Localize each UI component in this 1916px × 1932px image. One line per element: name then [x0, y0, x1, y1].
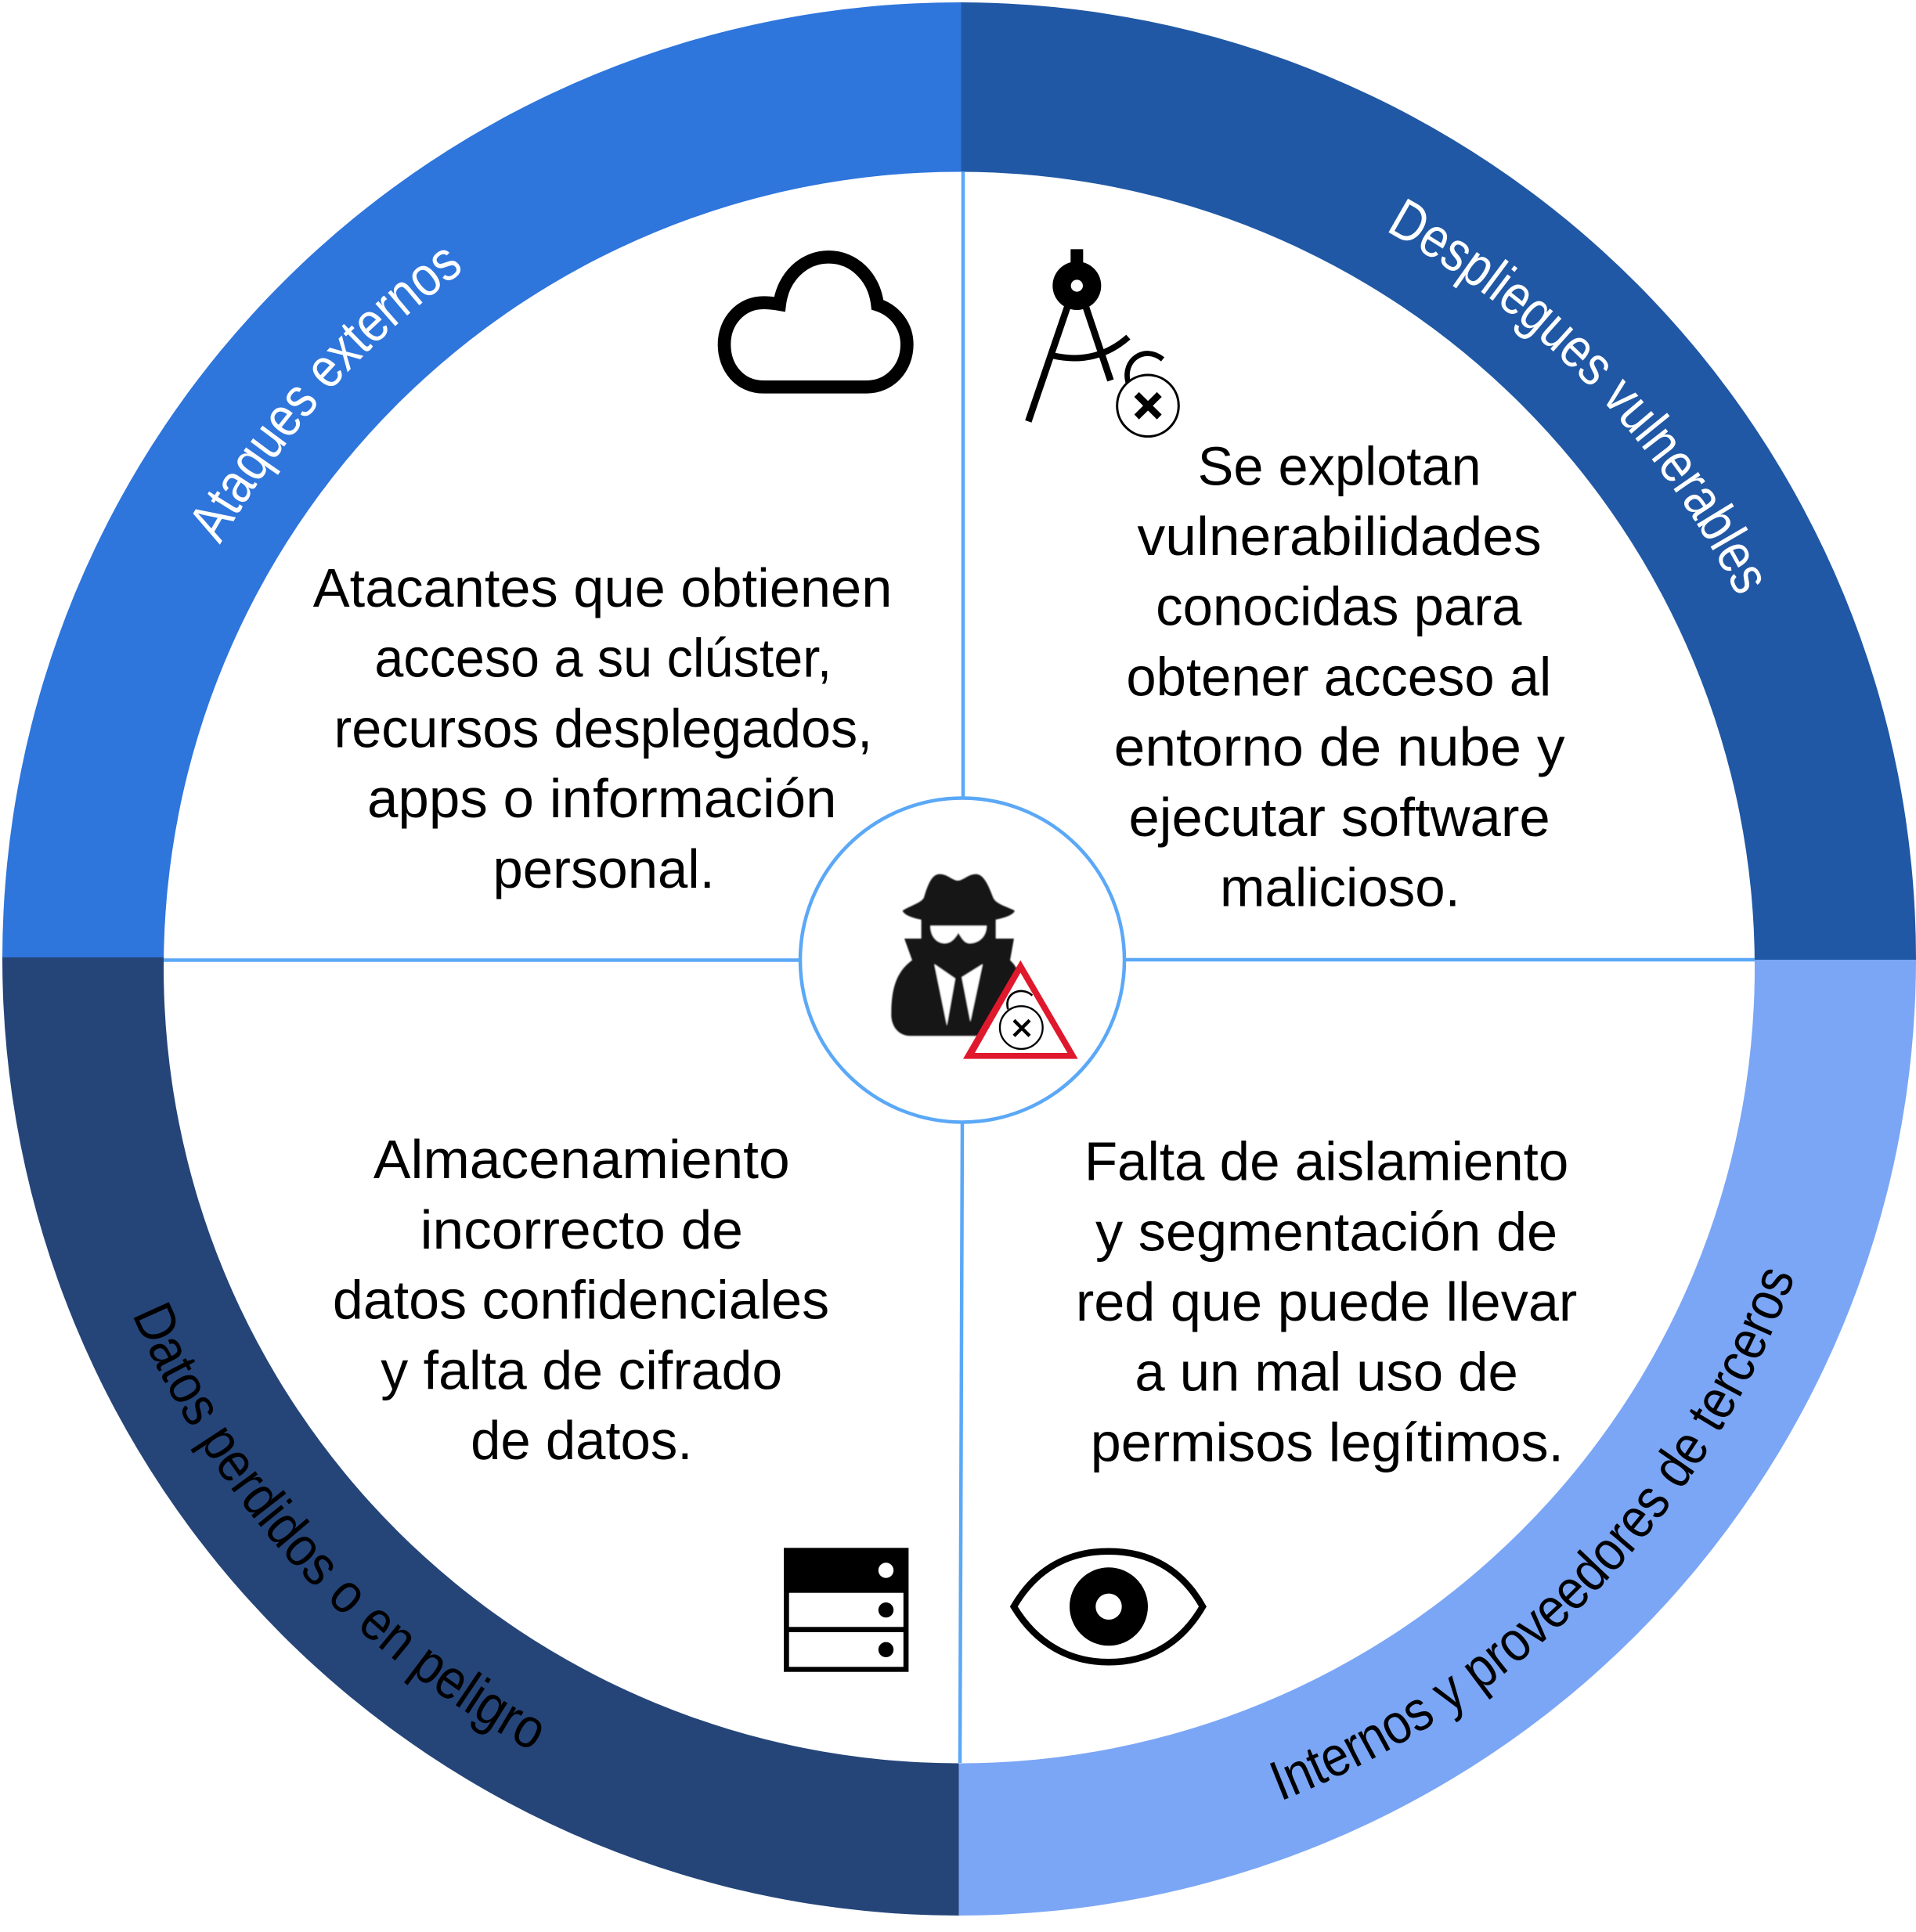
text block: vulnerable deployments: malicioso. — [1220, 856, 1460, 917]
icon: compass with open lock — [1028, 249, 1178, 437]
ring label: Ataques externos: Ataques externos — [193, 251, 460, 545]
text block: insiders and third parties: a un mal uso de — [1135, 1342, 1518, 1403]
icon: eye — [1014, 1552, 1203, 1662]
text block: lost data: y falta de cifrado — [381, 1339, 782, 1400]
icon: cloud — [724, 257, 907, 387]
text block: external attacks: recursos desplegados, — [334, 697, 872, 759]
text block: vulnerable deployments: ejecutar software — [1129, 787, 1550, 848]
text block: insiders and third parties — [1076, 1131, 1577, 1472]
text block: insiders and third parties: red que puede llevar — [1076, 1271, 1577, 1332]
text block: external attacks: apps o información — [367, 768, 837, 829]
text block: external attacks — [313, 557, 892, 899]
icon: spy with warning triangle — [891, 874, 1078, 1059]
text block: external attacks: acceso a su clúster, — [374, 628, 832, 689]
text block: external attacks: personal. — [493, 838, 715, 899]
ring label: Internos y proveedores de terceros: Internos y proveedores de terceros — [1270, 1270, 1793, 1800]
text block: lost data — [333, 1129, 829, 1471]
ring label: Datos perdidos o en peligro: Datos perdidos o en peligro — [133, 1302, 542, 1747]
text block: vulnerable deployments: vulnerabilidades — [1138, 506, 1542, 567]
text block: insiders and third parties: y segmentación de — [1095, 1201, 1557, 1262]
text block: lost data: datos confidenciales — [333, 1270, 829, 1331]
text block: vulnerable deployments: entorno de nube y — [1114, 716, 1565, 777]
text block: vulnerable deployments: conocidas para — [1156, 576, 1522, 637]
text block: lost data: de datos. — [471, 1410, 692, 1471]
text block: insiders and third parties: Falta de aislamiento — [1084, 1131, 1568, 1192]
text block: lost data: incorrecto de — [420, 1199, 743, 1260]
center circle — [800, 798, 1124, 1123]
ring label: Despliegues vulnerables: Despliegues vulnerables — [1389, 199, 1762, 593]
spy figure — [891, 874, 1026, 1036]
text block: vulnerable deployments: obtener acceso al — [1126, 646, 1551, 707]
text block: vulnerable deployments: Se explotan — [1198, 435, 1481, 496]
text block: vulnerable deployments — [1114, 435, 1565, 917]
warning triangle — [963, 961, 1078, 1059]
text block: external attacks: Atacantes que obtienen — [313, 557, 892, 618]
icon: server stack — [784, 1548, 908, 1672]
text block: insiders and third parties: permisos legítimos. — [1091, 1411, 1564, 1472]
text block: lost data: Almacenamiento — [373, 1129, 790, 1190]
